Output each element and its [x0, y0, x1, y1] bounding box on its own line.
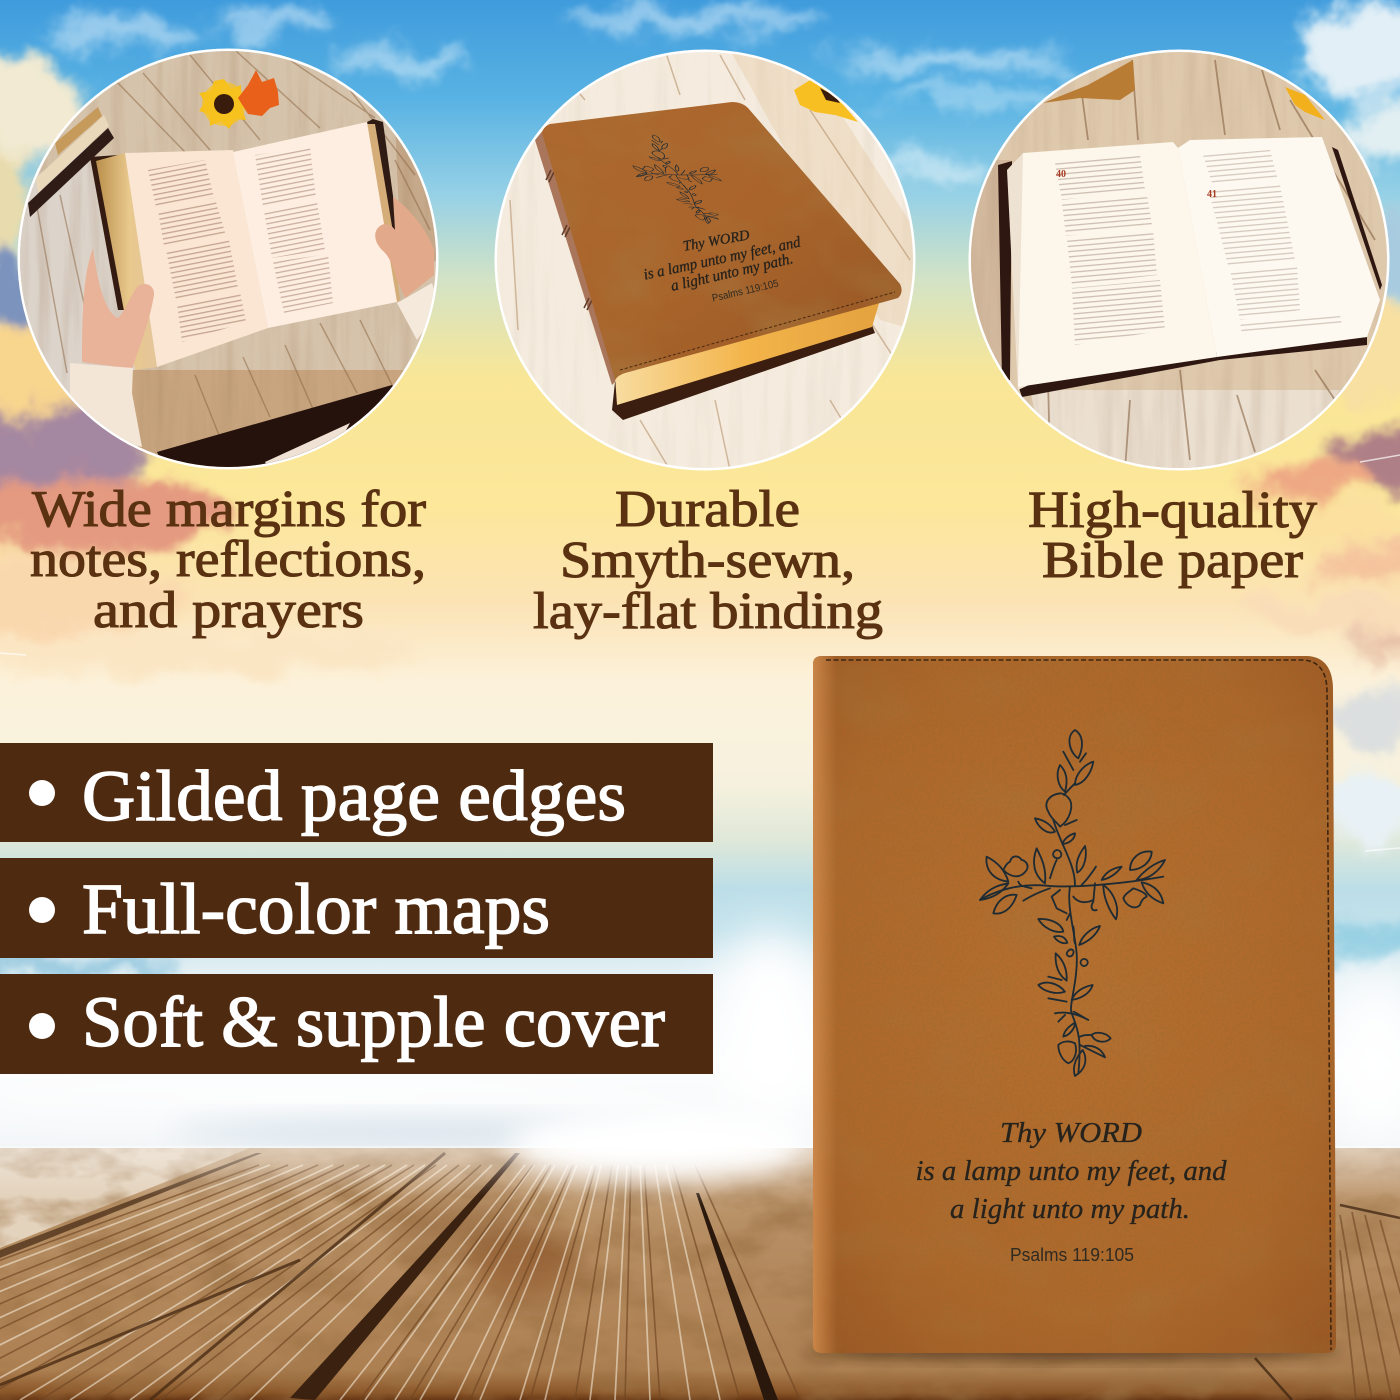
plank gaps — [290, 1153, 520, 1400]
cover stitching — [826, 660, 1331, 1350]
small floral cross — [632, 134, 722, 224]
main book cover — [805, 650, 1345, 1360]
feature bar: soft cover: Soft & supple cover — [82, 982, 665, 1062]
right page edge and cover — [367, 119, 395, 230]
feature bar: gilded page edges — [0, 743, 713, 842]
engraved verse: Thy WORD — [1000, 1117, 1142, 1149]
wood tabletop 2 — [497, 52, 913, 468]
feature bar: gilded page edges: Gilded page edges — [82, 756, 626, 836]
gilded page edge — [96, 153, 157, 370]
caption: wide margins: notes, reflections, — [30, 531, 426, 588]
caption: wide margins: and prayers — [93, 582, 364, 639]
dark cover bottom — [1018, 337, 1367, 397]
caption: bible paper — [1028, 482, 1317, 589]
spine ridges — [546, 170, 592, 310]
left page text — [148, 160, 246, 342]
photo circle: wide margins — [18, 48, 438, 470]
stacked books at the corner — [28, 107, 114, 217]
table edge — [157, 385, 393, 467]
photo circle: bible paper — [960, 40, 1400, 480]
caption: bible paper: Bible paper — [1042, 532, 1303, 589]
sunflower — [199, 79, 250, 129]
caption: bible paper: High-quality — [1028, 482, 1317, 539]
floor grain: dark lines — [0, 1165, 800, 1400]
right page — [1178, 137, 1380, 357]
contrails — [0, 455, 1400, 851]
feature bar: full-color maps: Full-color maps — [82, 869, 550, 949]
caption: durable binding: lay-flat binding — [533, 583, 883, 640]
cover stitching — [620, 292, 895, 370]
floral cross — [980, 730, 1165, 1076]
left page — [125, 150, 268, 367]
caption: wide margins: Wide margins for — [32, 481, 426, 538]
gilded page block — [615, 300, 880, 405]
left page cover — [90, 155, 126, 310]
wood tabletop 3 — [960, 40, 1400, 480]
caption: durable binding — [533, 481, 883, 640]
engraved verse: is a lamp unto my feet, and — [916, 1155, 1227, 1187]
small engraved verse: Psalms 119:105 — [711, 278, 780, 305]
chapter numbers — [1056, 169, 1217, 200]
right floor grain — [1340, 1212, 1400, 1400]
book spine — [535, 128, 622, 385]
engraved verse: Psalms 119:105 — [1010, 1245, 1134, 1265]
feature bar: soft cover — [0, 974, 713, 1074]
chapter numbers: 40 — [1056, 169, 1066, 180]
right page text — [255, 147, 333, 313]
book bottom cover — [612, 325, 875, 420]
feature bar: full-color maps — [0, 858, 713, 958]
caption: wide margins — [30, 481, 426, 639]
sunflower corner — [1285, 87, 1325, 120]
page block edge — [1007, 153, 1040, 390]
small engraved verse: is a lamp unto my feet, and — [642, 234, 802, 284]
right hand — [375, 197, 434, 298]
left page — [1018, 142, 1217, 387]
small engraved verse: a light unto my path. — [669, 250, 795, 295]
photo circle: durable binding — [490, 40, 930, 480]
wood tabletop 1 — [20, 51, 436, 467]
sweater sleeves — [70, 363, 142, 447]
dark cover left — [998, 161, 1012, 380]
leather cover top — [535, 95, 910, 390]
engraved verse: a light unto my path. — [950, 1193, 1190, 1225]
right page — [233, 122, 397, 328]
small engraved verse — [642, 227, 802, 305]
left page text — [1055, 155, 1165, 345]
caption: durable binding: Smyth-sewn, — [560, 532, 855, 589]
left hand — [82, 248, 154, 369]
chapter numbers: 41 — [1207, 189, 1217, 200]
dark cover right — [1332, 147, 1382, 290]
orange flower — [238, 70, 279, 116]
small engraved verse: Thy WORD — [682, 227, 751, 255]
engraved verse — [916, 1117, 1227, 1265]
floor grain: light streaks — [0, 1165, 720, 1400]
caption: durable binding: Durable — [615, 481, 800, 538]
sunflower corner — [794, 77, 858, 122]
burlap — [1043, 60, 1135, 103]
right page text — [1203, 150, 1342, 335]
wooden floor — [0, 1109, 1400, 1400]
